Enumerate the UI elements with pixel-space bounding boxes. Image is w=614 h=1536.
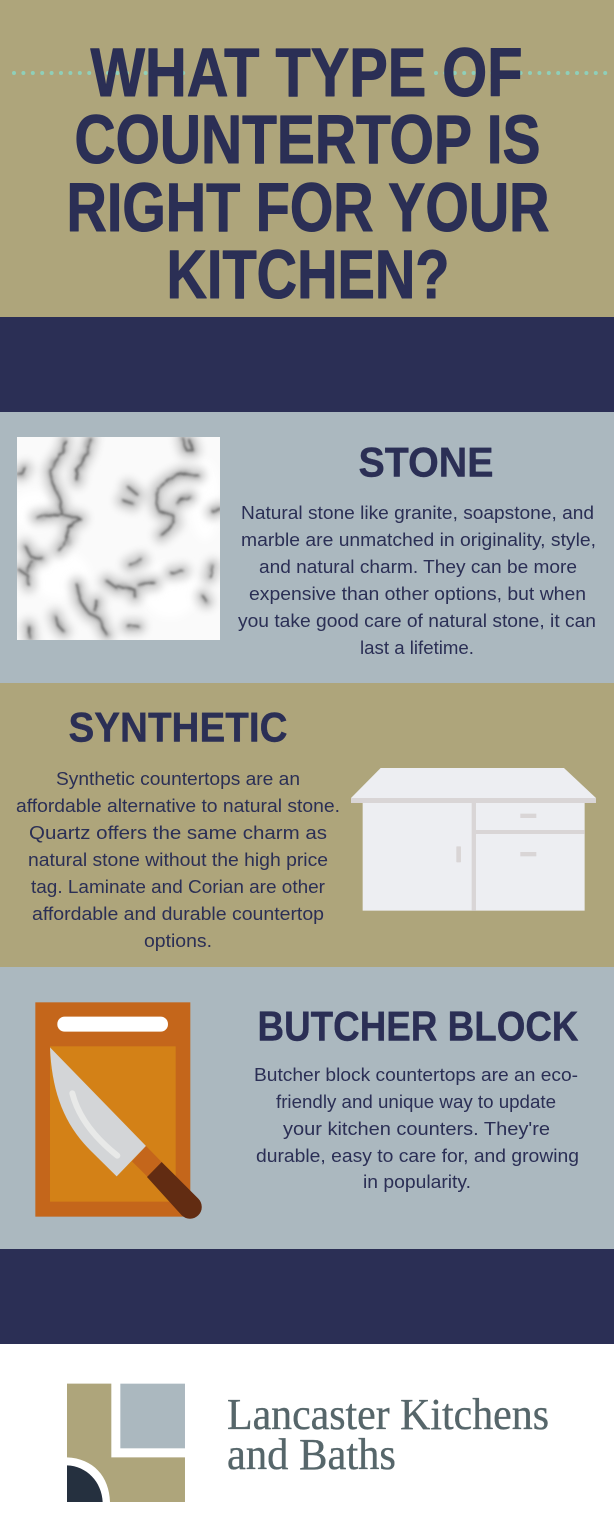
header band: [0, 0, 614, 317]
heading: synthetic: SYNTHETIC: [68, 704, 288, 750]
butcher block text: durable, easy to care for, and growing: [256, 1145, 579, 1166]
synthetic text: Synthetic countertops are an: [56, 768, 300, 789]
stone text: [238, 502, 596, 658]
panel: stone background: [0, 412, 614, 683]
title: WHAT TYPE OF: [90, 34, 522, 111]
icon: cutting board and knife: [35, 1002, 202, 1219]
butcher block text: in popularity.: [363, 1171, 471, 1192]
title: [66, 34, 550, 313]
logo text: [227, 1390, 549, 1479]
synthetic text: options.: [144, 930, 212, 951]
icon: kitchen cabinet: [351, 768, 596, 911]
panel: butcher block background: [0, 967, 614, 1249]
butcher block text: Butcher block countertops are an eco-: [254, 1064, 578, 1085]
synthetic text: [16, 768, 340, 951]
stone text: marble are unmatched in originality, style,: [241, 529, 596, 550]
stone text: and natural charm. They can be more: [259, 556, 577, 577]
heading: butcher block: BUTCHER BLOCK: [258, 1002, 579, 1050]
dotted line behind title: [14, 71, 610, 75]
navy band bottom: [0, 1249, 614, 1344]
synthetic text: natural stone without the high price: [28, 849, 328, 870]
title: KITCHEN?: [166, 236, 450, 313]
synthetic text: affordable alternative to natural stone.: [16, 795, 340, 816]
synthetic text: tag. Laminate and Corian are other: [31, 876, 325, 897]
heading: stone: STONE: [358, 438, 494, 486]
butcher block text: [254, 1064, 579, 1192]
synthetic text: affordable and durable countertop: [32, 903, 324, 924]
stone text: Natural stone like granite, soapstone, and: [241, 502, 594, 523]
panel: synthetic background: [0, 683, 614, 967]
stone text: you take good care of natural stone, it can: [238, 610, 596, 631]
butcher block text: friendly and unique way to update: [276, 1091, 556, 1112]
navy band top: [0, 317, 614, 412]
logo text: and Baths: [227, 1430, 396, 1479]
butcher block text: your kitchen counters. They're: [283, 1118, 550, 1139]
marble image: [11, 437, 220, 640]
stone text: last a lifetime.: [360, 637, 474, 658]
stone text: expensive than other options, but when: [249, 583, 586, 604]
synthetic text: Quartz offers the same charm as: [29, 822, 327, 843]
footer background: [0, 1344, 614, 1536]
logo mark: [67, 1384, 185, 1502]
logo text: Lancaster Kitchens: [227, 1390, 549, 1439]
